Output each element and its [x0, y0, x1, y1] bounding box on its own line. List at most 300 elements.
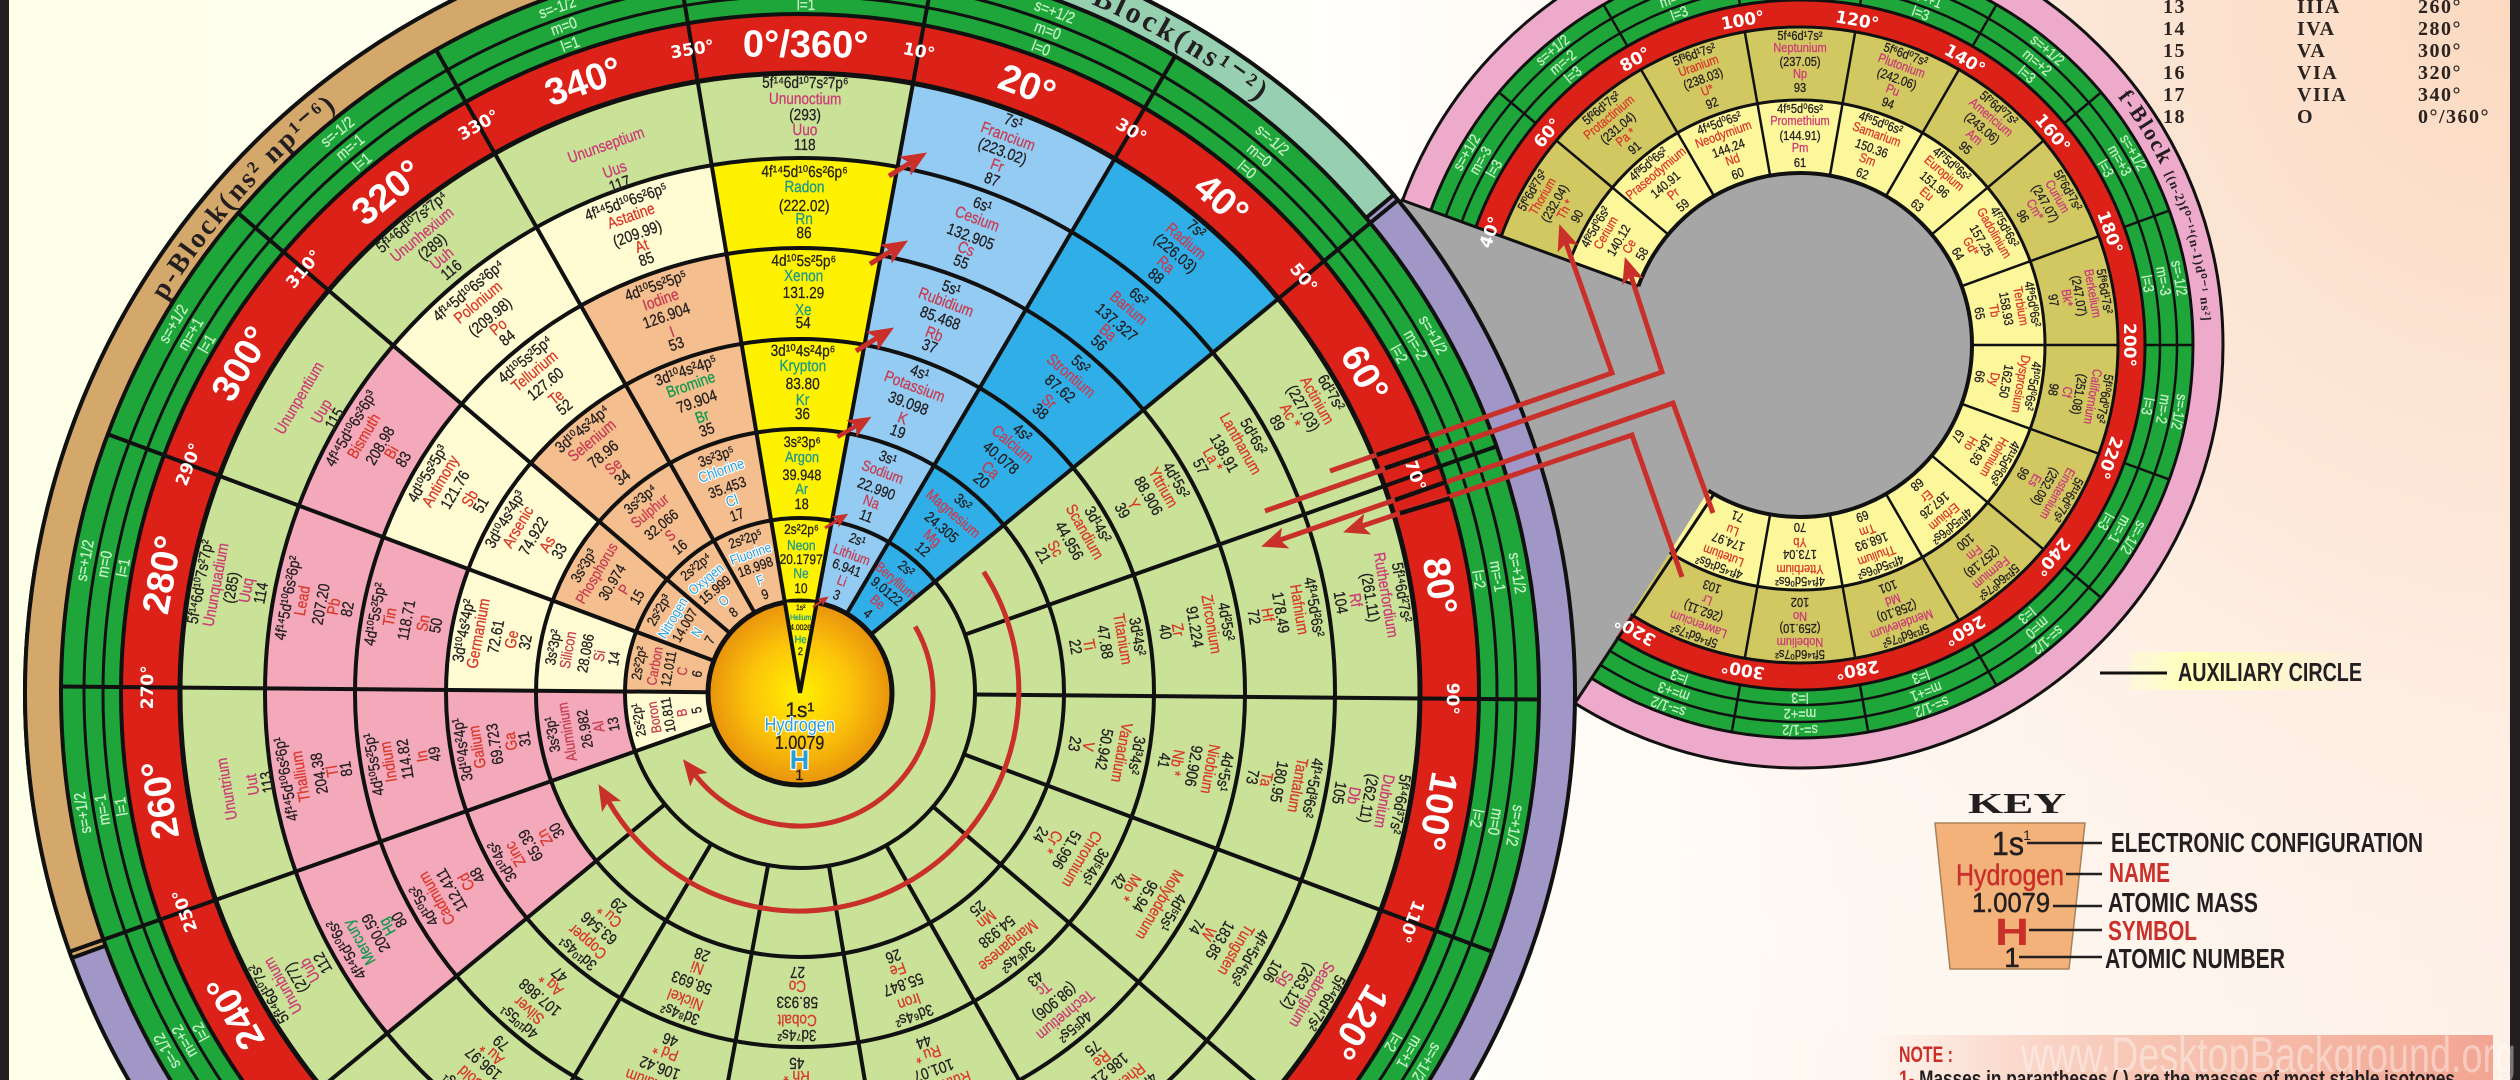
element: Uranium: 92 [1704, 94, 1721, 112]
element: Rubidium: Rb [923, 324, 945, 346]
element: Cadmium: 4d¹⁰5s² [406, 882, 443, 929]
element: Indium: Indium [378, 740, 401, 783]
element: Actinium: 6d¹7s² [1313, 372, 1347, 414]
element: Krypton [770, 343, 835, 424]
element: Iodine: I [668, 324, 677, 341]
element: Ununquadium: (285) [221, 571, 244, 605]
element: Ytterbium [1775, 520, 1825, 589]
element: Polonium: (209.98) [466, 295, 516, 340]
element: Europium: 63 [1908, 196, 1927, 215]
element: Antimony: 51 [471, 495, 493, 516]
element: Bismuth: 83 [393, 449, 416, 471]
element: Magnesium [892, 474, 994, 577]
element: Gadolinium: 64 [1948, 245, 1968, 263]
element: Neodymium: 60 [1729, 164, 1746, 183]
arrow: lawrencium link back to main circle [1362, 435, 1682, 577]
element: Tellurium: 4d¹⁰5s²5p⁴ [495, 333, 556, 387]
element: Dubnium [1324, 762, 1413, 835]
element: Tellurium: 52 [554, 397, 576, 419]
intermediate angle labels: 70° [1400, 457, 1429, 494]
element: Radium: Radium [1162, 220, 1209, 264]
key labels: NAME [2109, 857, 2170, 888]
element: Bromine: Br [693, 407, 712, 428]
element: Fluorine: F [754, 571, 766, 589]
auxiliary circle quantum number labels: s=+1/2 [2027, 31, 2068, 69]
element: Manganese: 25 [966, 896, 988, 919]
element: Titanium: 3d²4s² [1125, 616, 1148, 657]
element: Argon: Ar [795, 480, 809, 497]
auxiliary circle quantum number labels: m=-1 [2105, 513, 2135, 547]
auxiliary circle degree labels: 180° [2092, 208, 2126, 257]
element: Tellurium: Te [546, 387, 568, 409]
element: Manganese: Mn [973, 906, 999, 931]
key sample cell: 1s [1992, 825, 2024, 862]
element: Magnesium: 12 [912, 538, 934, 560]
element: Chlorine: 3s²3p⁵ [696, 442, 736, 470]
element: Tungsten: 4f¹⁴5d⁴6s² [1225, 926, 1271, 988]
element: Nitrogen [640, 586, 728, 663]
element: Curium: (247.07) [2029, 182, 2062, 225]
element: Lanthanum: 138.91 [1206, 431, 1241, 476]
auxiliary circle quantum number labels: m=-3 [1465, 143, 1495, 177]
auxiliary circle quantum number labels: l=3 [2015, 62, 2040, 87]
element: Calcium: Ca [978, 459, 1003, 483]
element: Fermium: Fm [1963, 542, 1985, 564]
auxiliary circle quantum number labels: m=+2 [1783, 706, 1816, 723]
element: Plutonium: 5f⁶6d⁰7s² [1882, 39, 1930, 69]
element: Thallium: 4f¹⁴5d¹⁰6s²6p¹ [271, 735, 302, 822]
element: Barium: 6s² [1125, 285, 1151, 310]
element: Boron: Boron [644, 700, 665, 734]
auxiliary circle quantum number labels: s=-1/2 [1648, 693, 1688, 721]
element: Terbium [1968, 280, 2044, 337]
element: Cerium: 58 [1633, 245, 1652, 263]
element: Yttrium: Y [1123, 497, 1143, 513]
element: Iodine: Iodine [641, 286, 681, 315]
element: Carbon: Carbon [643, 645, 666, 687]
element: Radium [1131, 207, 1221, 300]
element: Ununoctium: (293) [789, 107, 821, 124]
group angle labels on the red ring: 80° [1414, 554, 1465, 618]
element: Niobium: 4d⁴5s¹ [1212, 750, 1236, 793]
element: Technetium: 43 [1024, 967, 1046, 989]
element: Nickel: 3d⁸4s² [659, 998, 702, 1028]
element: Ruthenium: Ru * [912, 1041, 943, 1066]
element: Einsteinium: (252.08) [2029, 465, 2062, 508]
group reference table: group, subgroup, angle: 15 [2163, 40, 2186, 62]
element: Krypton: Kr [796, 392, 809, 409]
group reference table: group, subgroup, angle: VIA [2297, 62, 2338, 84]
element: Gadolinium [1937, 199, 2025, 282]
quantum number labels on the green rings: s=+1/2 [1414, 313, 1450, 358]
element: Terbium: 4f⁹5d⁰6s² [2021, 280, 2044, 328]
auxiliary circle quantum number labels: m=-2 [2153, 393, 2175, 425]
quantum number labels on the green rings: s=+1/2 [156, 302, 192, 347]
element: Yttrium [1103, 458, 1193, 534]
element: Copper: 63.546 [578, 907, 621, 947]
element: Helium: He [794, 634, 807, 646]
element: Magnesium: Mg [920, 525, 945, 550]
radial spokes [55, 0, 1545, 1080]
element: Neptunium: 5f⁴6d¹7s² [1777, 28, 1823, 43]
element: Aluminium: Al [589, 720, 608, 734]
element: Polonium [430, 257, 547, 373]
element: Tin: 4d¹⁰5s²5p² [362, 582, 390, 647]
element: Beryllium: Beryllium [872, 559, 920, 603]
element: Ununquadium: 5f¹⁴6d¹⁰7s²7p² [185, 538, 217, 625]
element: Iodine: 126.904 [641, 300, 693, 333]
element: Vanadium: Vanadium [1107, 721, 1135, 784]
element: Bismuth [323, 388, 433, 501]
group reference table: group, subgroup, angle: 340° [2418, 84, 2462, 106]
element: Phosphorus: P [614, 581, 633, 597]
element: Neon [779, 521, 823, 596]
element: Dysprosium: 4f¹⁰5d⁰6s² [2021, 360, 2044, 412]
element: Praseodymium: 59 [1673, 195, 1693, 215]
element: Radon: Radon [784, 179, 824, 197]
element: Germanium: Germanium [464, 597, 494, 670]
element: Sulphur: 3s²3p⁴ [620, 480, 660, 518]
element: Uranium: U* [1699, 81, 1716, 99]
element: Cobalt [776, 962, 818, 1043]
element: Holmium: 164.93 [1966, 431, 1996, 468]
element: Neptunium: 93 [1794, 80, 1806, 95]
element: Thallium: Tl [324, 764, 343, 778]
auxiliary circle quantum number labels: s=-1/2 [2168, 393, 2191, 431]
element: Sodium: 22.990 [855, 474, 898, 503]
element: Chromium: 3d⁵4s¹ [1077, 845, 1112, 888]
element: Palladium: 46 [661, 1028, 681, 1050]
element: Ununseptium: Ununseptium [566, 124, 647, 167]
element: Cesium: Cesium [952, 204, 1002, 236]
element: Rutherfordium: (261.11) [1357, 572, 1382, 624]
element: Technetium: Technetium [1033, 985, 1097, 1043]
element: Potassium: 19 [887, 422, 908, 443]
quantum number labels on the green rings: m=-1 [1486, 560, 1508, 593]
quantum number labels on the green rings: l=0 [1234, 158, 1259, 183]
element: Cesium [935, 189, 1008, 279]
element: Germanium: 72.61 [485, 619, 508, 655]
element: Fermium: 100 [1953, 530, 1977, 554]
element: Titanium: 22 [1065, 638, 1084, 656]
element: Thorium: 5f⁰6d²7s² [1514, 167, 1550, 214]
element: Dysprosium: Dy [1986, 371, 2003, 387]
element: Plutonium: (242.06) [1875, 65, 1919, 93]
element: Curium: 5f⁷6d¹7s² [2050, 167, 2086, 213]
group angle labels on the red ring: 60° [1332, 339, 1396, 409]
intermediate angle labels: 350° [669, 36, 716, 63]
element: Fluorine: 18.998 [735, 553, 775, 581]
element: Silicon: 3s²3p² [541, 628, 565, 667]
element: Boron: 5 [688, 706, 705, 715]
element: Seaborgium: Seaborgium [1285, 958, 1337, 1030]
element: Gadolinium: 4f⁷5d¹6s² [1987, 204, 2022, 250]
black lead-line segments across red ring [1377, 437, 1450, 513]
element: Protactinium: Protactinium [1581, 92, 1637, 143]
element: Holmium: Ho [1961, 434, 1981, 454]
element: Nickel: 58.693 [670, 966, 715, 997]
element: Berkelium [2042, 266, 2116, 326]
element: Yttrium: 39 [1110, 500, 1133, 522]
element: Phosphorus: 15 [626, 586, 648, 607]
element: Rubidium: 37 [919, 336, 939, 358]
auxiliary circle quantum number labels: l=3 [2138, 274, 2158, 294]
element: Samarium: Samarium [1851, 119, 1903, 150]
element: Tungsten: W [1197, 923, 1218, 943]
element: Carbon: C [673, 665, 691, 677]
element: Astatine: At [633, 236, 652, 257]
element: Rhenium: 75 [1081, 1036, 1103, 1059]
element: Uranium [1671, 40, 1735, 118]
element: Berkelium: Bk* [2058, 288, 2076, 308]
element: Thorium [1514, 167, 1595, 240]
element: Polonium: Polonium [451, 278, 506, 328]
element: Zirconium: 4d²5s² [1214, 601, 1237, 642]
element: Erbium: 68 [1907, 475, 1927, 495]
element: Lithium: 2s¹ [847, 529, 869, 550]
element: Nobelium [1775, 595, 1825, 662]
element: Barium: Ba [1095, 321, 1120, 345]
element: Cobalt: 3d⁷4s² [777, 1026, 817, 1043]
element: Rhenium: Re [1089, 1046, 1113, 1070]
group angle labels on the red ring: 0°/360° [743, 23, 869, 67]
element: Nitrogen: 14.007 [668, 605, 701, 645]
group reference table: group, subgroup, angle: 17 [2163, 84, 2186, 106]
element: Thorium: 90 [1568, 207, 1587, 225]
element: Manganese: 3d⁵4s² [996, 937, 1038, 976]
element: Protactinium: 5f²6d¹7s² [1579, 88, 1623, 128]
element: Aluminium: 13 [603, 716, 623, 733]
element: Lutetium: Lu [1724, 521, 1741, 540]
auxiliary circle quantum number labels: l=3 [1561, 62, 1585, 86]
element: Calcium: Calcium [988, 422, 1036, 467]
quantum number labels on the green rings: m=0 [1484, 807, 1505, 836]
heading: p-Block: p-Block(ns² np¹⁻⁶) [154, 98, 335, 304]
element: Bromine: 3d¹⁰4s²4p⁵ [653, 352, 719, 390]
element: Palladium: Pd * [651, 1038, 681, 1064]
element: Rubidium: 5s¹ [939, 278, 963, 300]
element: Ytterbium: 70 [1794, 520, 1806, 535]
auxiliary circle degree labels: 200° [2119, 323, 2139, 367]
element: Ununtrium: Ununtrium [214, 756, 241, 821]
element: Francium: 87 [982, 170, 1002, 191]
element: Zinc: 30 [547, 819, 569, 841]
element: Chromium [1016, 803, 1117, 898]
main circle element cells [180, 70, 1421, 1080]
intermediate angle labels: 30° [1112, 114, 1150, 148]
element: Magnesium: Magnesium [923, 485, 984, 541]
group angle labels on the red ring: 300° [204, 320, 280, 409]
auxiliary circle quantum number labels: l=3 [2094, 156, 2118, 180]
element: Beryllium [844, 546, 930, 635]
element: Molybdenum: 95.94 [1128, 877, 1160, 915]
auxiliary circle quantum number labels: m=+3 [2104, 142, 2136, 179]
auxiliary circle quantum number labels: s=-1/2 [2117, 518, 2150, 558]
element: Lawrencium [1664, 570, 1743, 653]
element: Selenium: Se [602, 456, 626, 479]
element: Lawrencium: 103 [1701, 576, 1723, 597]
element: Lanthanum: Lanthanum [1216, 410, 1264, 478]
element: Carbon [627, 642, 708, 695]
element: Holmium: 4f¹¹5d⁰6s² [1986, 438, 2023, 488]
element: Uranium: Uranium [1676, 51, 1720, 80]
element: Thallium: 81 [337, 760, 357, 778]
block headings on the outer band [154, 0, 1266, 304]
element: Argon: 18 [794, 495, 809, 512]
auxiliary circle quantum number labels: s=-1/2 [2168, 259, 2191, 297]
element: Mendelevium [1855, 568, 1939, 654]
element: Yttrium: 4d¹5s² [1158, 460, 1192, 502]
arrow: lanthanide link to cerium [1265, 276, 1662, 511]
element: Erbium: Erbium [1926, 500, 1962, 534]
auxiliary circle quantum number labels: m=+1 [1908, 678, 1945, 706]
element: Ununseptium [566, 124, 661, 206]
element: Einsteinium: 99 [2013, 465, 2032, 483]
element: Sodium: Sodium [860, 456, 906, 487]
quantum number labels on the green rings: m=-2 [1400, 327, 1430, 363]
element: Uranium: (238.03) [1681, 65, 1725, 93]
key sample cell: Hydrogen [1956, 859, 2064, 892]
element: Thulium [1837, 501, 1906, 582]
key labels [2105, 827, 2423, 974]
element: Lanthanum: La * [1198, 445, 1226, 475]
quantum number labels on the green rings: m=-1 [92, 793, 114, 826]
element: Terbium: 158.93 [1996, 291, 2017, 327]
element: Ununquadium [185, 538, 278, 637]
element: Ununhexium: 116 [438, 257, 466, 284]
auxiliary circle quantum number labels: s=-1/2 [2028, 622, 2067, 658]
element: Iron: 55.847 [880, 969, 925, 999]
element: Aluminium: 26.982 [573, 708, 596, 750]
element: Beryllium: 2s² [895, 557, 918, 580]
element: Neptunium: Neptunium [1773, 40, 1827, 55]
element: Radium: 7s² [1183, 217, 1209, 242]
element: Scandium: 21 [1031, 545, 1053, 567]
element: Niobium: Niobium [1196, 743, 1222, 795]
element: Argon: Argon [785, 448, 819, 465]
element: Ununquadium: Ununquadium [200, 542, 233, 628]
element: Hafnium: 4f¹⁴5d²6s² [1300, 576, 1327, 638]
element: Arsenic [482, 488, 584, 584]
f-Block heading: f-Block [(n-2)f⁰⁻¹⁴(n-1)d⁰⁻¹ ns²] [2118, 90, 2212, 320]
coloured element cell fills [254, 69, 1286, 1045]
element: Tantalum: Ta [1255, 771, 1275, 789]
element: Seaborgium: Sg [1273, 967, 1296, 990]
auxiliary circle degree labels: 240° [2030, 533, 2074, 580]
quantum number labels on the green rings: m=-1 [333, 131, 368, 165]
quantum number labels on the green rings: l=1 [112, 796, 132, 817]
element: Nobelium: (259.10) [1779, 621, 1821, 636]
element: Argon: 39.948 [782, 466, 822, 483]
element: Aluminium: Aluminium [553, 701, 580, 763]
quantum number labels on the green rings: s=+1/2 [72, 791, 96, 835]
auxiliary circle degree labels: 80° [1617, 43, 1654, 77]
element: Sulphur: S [661, 526, 679, 545]
element: Seaborgium: (263.12) [1277, 960, 1318, 1012]
element: Holmium: 67 [1948, 427, 1967, 445]
element: Antimony: 121.76 [438, 468, 474, 513]
element: Barium: 56 [1087, 332, 1110, 355]
element: Californium: Cf [2059, 385, 2076, 399]
element: Tellurium: Tellurium [509, 348, 562, 396]
element: Tantalum: 4f¹⁴5d³6s² [1298, 757, 1326, 819]
element: Calcium [956, 411, 1046, 504]
element: Niobium: Nb * [1165, 748, 1187, 777]
element: Thorium: Th * [1553, 197, 1577, 222]
element: Strontium: 87.62 [1041, 372, 1078, 407]
element: Lanthanum: 57 [1189, 456, 1211, 478]
element: Lithium: Lithium [831, 540, 873, 569]
element: Iodine: 4d¹⁰5s²5p⁵ [623, 268, 689, 305]
element: Fermium: (257.18) [1962, 543, 2003, 581]
element: Galium: 31 [516, 730, 535, 748]
group angle labels on the red ring: 40° [1185, 166, 1256, 235]
element: Nickel: Ni [689, 956, 707, 977]
element: Actinium: (227.03) [1283, 382, 1322, 435]
quantum number labels on the green rings: l=2 [1466, 808, 1486, 829]
element: Gold: 79 [490, 1031, 513, 1054]
element: Cadmium: Cd [455, 869, 479, 893]
element: Tellurium [495, 333, 596, 435]
element: Lead: 82 [339, 600, 358, 618]
element: Silicon [541, 626, 626, 679]
arrow: lutetium link back to main circle [1280, 403, 1713, 540]
intermediate angle labels [136, 31, 1468, 946]
element: Tin: 118.71 [395, 599, 420, 642]
element: Cadmium: 48 [467, 864, 490, 886]
element: Ununhexium: Uuh [427, 245, 457, 274]
element: Arsenic: 3d¹⁰4s²4p³ [482, 488, 530, 552]
element: Berkelium: 97 [2045, 293, 2062, 308]
element: Einsteinium: Es [2025, 471, 2045, 490]
element: Hydrogen: 1s¹ [785, 699, 815, 722]
element: Germanium [449, 594, 541, 679]
auxiliary circle degree labels: 220° [2092, 433, 2126, 482]
element: Copper: 29 [608, 893, 631, 916]
group reference table: group, subgroup, angle: 16 [2163, 62, 2186, 84]
element: Americium: Americium [1966, 95, 2016, 140]
element: Mendelevium: 5f¹³6d⁰7s² [1880, 620, 1931, 651]
element: Neodymium: 144.24 [1710, 135, 1747, 161]
element: Tantalum: 73 [1242, 768, 1261, 786]
element: Cerium: Cerium [1590, 214, 1621, 252]
auxiliary circle quantum number labels [1449, 0, 2191, 739]
element: Cesium: 132.905 [944, 221, 996, 254]
element: Radium: 88 [1144, 265, 1167, 288]
element: Vanadium: 3d³4s² [1124, 735, 1148, 776]
element: Selenium [552, 402, 653, 506]
note panel: NOTE : [1899, 1042, 1953, 1067]
element: Silicon: Si [590, 649, 609, 663]
element: Plutonium: 94 [1880, 94, 1897, 112]
group angle labels on the red ring: 120° [1320, 977, 1396, 1066]
element: Astatine: 4f¹⁴5d¹⁰6s²6p⁵ [583, 180, 670, 225]
element: Cobalt: 58.933 [776, 992, 818, 1010]
element: Lawrencium: 5f¹⁴6d¹7s² [1669, 620, 1720, 651]
element: Zirconium: 40 [1154, 623, 1174, 641]
element: Boron: 2s²2p¹ [628, 701, 649, 738]
intermediate angle labels: 110° [1394, 897, 1428, 945]
element: Cerium: 140.12 [1604, 222, 1634, 259]
element: Galium [450, 706, 539, 782]
element: Cerium [1578, 204, 1660, 277]
element: Ununpentium: Uup [309, 397, 336, 427]
element: Francium: 7s¹ [1002, 111, 1025, 134]
element: Bromine [653, 352, 740, 450]
callout: auxiliary circle [2100, 652, 2370, 690]
element: Rutherfordium: Rf [1345, 592, 1364, 609]
element: Rhodium: 45 [789, 1054, 804, 1071]
